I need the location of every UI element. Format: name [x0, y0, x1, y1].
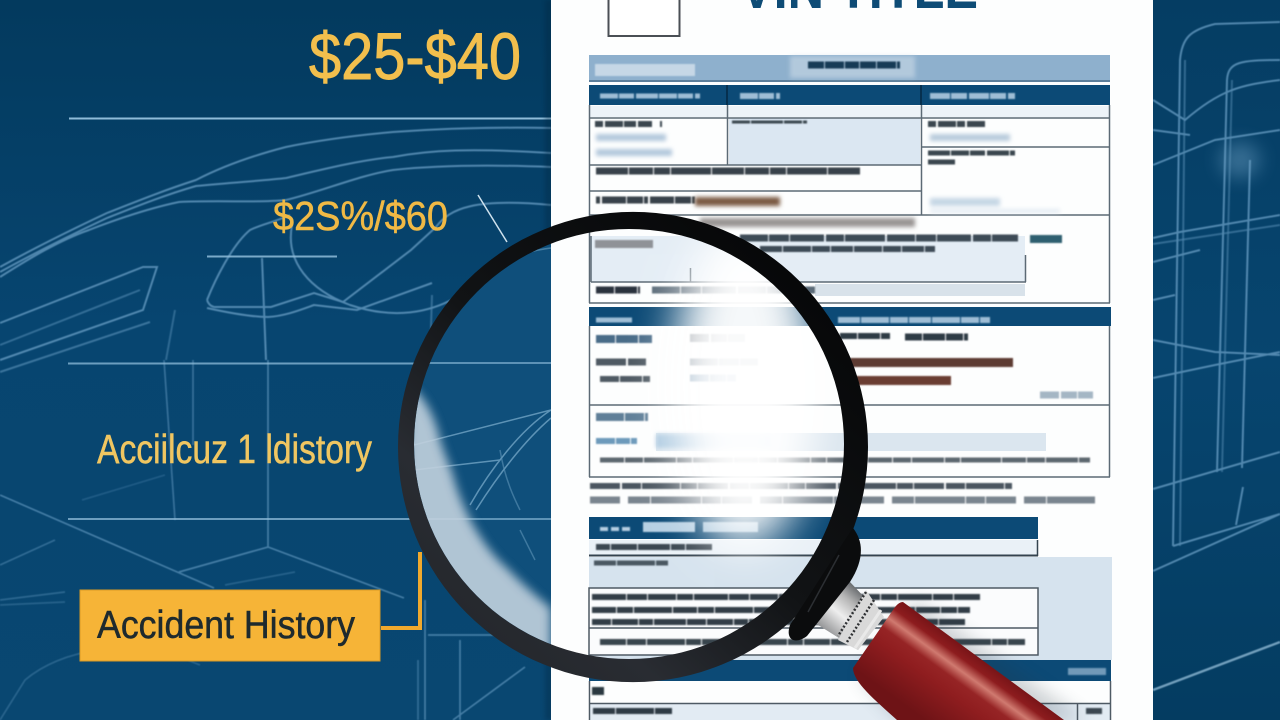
- document page: [551, 0, 1153, 720]
- car blueprint sketch: left: [0, 128, 551, 372]
- lens: handle joint bulge: [789, 528, 861, 640]
- accident history connector arrow: [381, 552, 420, 628]
- form: section three with bars: [589, 307, 1111, 477]
- document shadow: [545, 0, 553, 720]
- garbled accident history label: Acciilcuz 1 ldistory: [97, 426, 372, 472]
- lens: white haze over document: [673, 220, 817, 550]
- car blueprint sketch: right: [1153, 22, 1280, 690]
- accident history callout: Accident History: [97, 604, 355, 647]
- lens: ring: [398, 212, 868, 682]
- garbled price label: $2S%/$60: [273, 193, 448, 239]
- handle: red grip: [853, 602, 1064, 720]
- document checkbox: [608, 0, 680, 36]
- car blueprint sketch: lower left: [0, 360, 551, 720]
- handle: metal collar: [815, 582, 884, 650]
- form: brown value bars: [850, 358, 1013, 385]
- lens: glass glare: [414, 388, 551, 644]
- blueprint background: left panel: [0, 0, 551, 720]
- form: section two with inset box: [589, 218, 1110, 303]
- blueprint background: right panel: [1153, 0, 1280, 720]
- blueprint divider lines: [68, 118, 551, 519]
- car blueprint sketch: right glow patch: [1220, 142, 1260, 178]
- accident history callout: [80, 590, 380, 661]
- form: section one table: [589, 85, 1110, 303]
- form: section five table: [589, 517, 1112, 660]
- lens interior: [414, 242, 842, 644]
- form: section four notes: [590, 417, 1095, 500]
- lens: blueprint side: [414, 244, 551, 644]
- form: section six bottom table: [589, 660, 1111, 720]
- handle: shadow: [860, 600, 1085, 720]
- left labels: [97, 19, 521, 472]
- price heading: $25-$40: [309, 19, 521, 93]
- lens: ring highlight: [808, 555, 839, 612]
- magnifying glass: [398, 212, 1085, 720]
- form: top header band: [589, 55, 1110, 81]
